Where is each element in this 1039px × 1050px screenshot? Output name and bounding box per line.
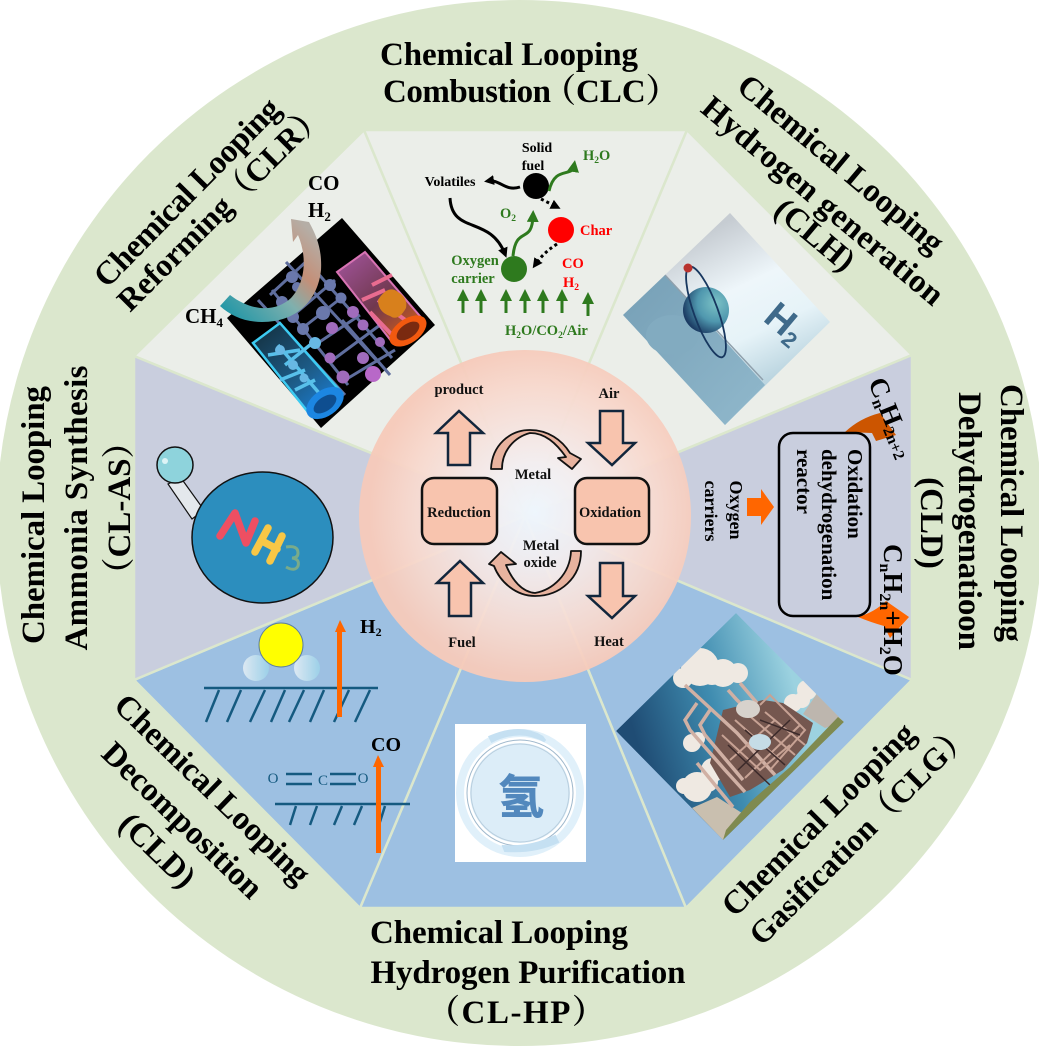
diagram: redox loop — [422, 382, 649, 651]
purple end node — [365, 366, 381, 382]
yellow atom — [259, 623, 303, 667]
pipes — [685, 683, 775, 807]
heading: CLR: Chemical Looping — [87, 91, 288, 295]
clouds — [673, 648, 817, 802]
heading: CL-HP: Hydrogen Purification — [370, 955, 686, 991]
central circle — [359, 350, 691, 682]
product formula: 2 — [876, 647, 893, 655]
diagram: dehydrogenation reactor: dehydrogenation — [817, 449, 841, 601]
label: CO: CO — [371, 734, 401, 756]
diagram: redox loop: Fuel — [448, 635, 476, 651]
heading: CLR: Reforming（CLR） — [109, 95, 332, 318]
image: hydrogen atom — [623, 213, 830, 425]
pink cylinder — [337, 252, 425, 342]
node: solid fuel — [523, 173, 549, 199]
heading: CL-HP: （CL-HP） — [427, 995, 605, 1031]
arrow: CH4 to CO and H2 — [220, 219, 321, 322]
blue cylinder — [253, 323, 342, 412]
diagram: solid fuel combustion: Oxygen — [451, 253, 499, 269]
reactant formula: H — [873, 399, 909, 430]
reactant formula: n — [868, 397, 887, 411]
oxygen carrier arrow — [747, 489, 774, 525]
label: H2: 2 — [376, 625, 382, 639]
panel: CLG sector background — [525, 516, 912, 908]
arrow: fuel — [437, 561, 483, 616]
diagram: solid fuel combustion: fuel — [522, 159, 544, 174]
panel: CLD dehydrogenation sector background — [525, 355, 912, 680]
diagram: solid fuel combustion: H — [583, 148, 594, 164]
diagram: redox loop: Heat — [594, 634, 624, 650]
node: char — [548, 217, 574, 243]
image: molecular reactor diagram — [227, 218, 435, 428]
panel: CL-HP sector background — [360, 516, 686, 908]
oxygen carrier labels: Oxygen — [726, 480, 746, 540]
reactant formula: C — [862, 373, 898, 402]
arrow: heat — [588, 563, 635, 618]
label: H2: 2 — [324, 209, 331, 224]
heading: CL-HP: Chemical Looping — [370, 915, 628, 951]
panel: CLC sector background — [364, 130, 687, 516]
bottom product arrow — [858, 601, 909, 638]
arrow: metal to oxidation — [491, 430, 581, 469]
connector arrows — [450, 166, 574, 265]
lower surface — [275, 804, 410, 825]
diagram: solid fuel combustion — [425, 141, 613, 341]
diagram: redox loop: oxide — [523, 555, 557, 571]
image: ammonia molecule — [157, 447, 333, 603]
heading: CLH: (CLH) — [767, 192, 862, 279]
diagram: dehydrogenation reactor: reactor — [792, 449, 816, 514]
top feed arrow — [845, 413, 896, 441]
heading: CLC: Chemical Looping — [380, 37, 638, 73]
diagram: solid fuel combustion: carrier — [451, 271, 495, 287]
heading: CLD dehydrogenation: (CLD) — [913, 477, 949, 569]
box: oxidation — [575, 478, 649, 544]
ground — [723, 717, 844, 840]
diagram: solid fuel combustion: 2 — [574, 283, 579, 293]
image: hydrogen atom: 2 — [777, 326, 802, 353]
arrow: product — [436, 411, 483, 465]
labels: Solid — [522, 141, 552, 156]
panel: CL-AS sector background — [134, 356, 525, 680]
heading: CLD dehydrogenation: Chemical Looping — [993, 384, 1029, 642]
heading: CLD decomposition: Chemical Looping — [107, 687, 318, 893]
heading: CLC: Combustion — [383, 74, 551, 110]
label: H2: H — [308, 198, 324, 222]
heading: CL-HP — [370, 915, 686, 1031]
heading: CL-AS — [16, 365, 138, 650]
reactor labels: Oxidation — [843, 449, 867, 539]
product formula: C — [878, 544, 908, 564]
heading: CLC: （CLC） — [543, 74, 679, 110]
diagram: solid fuel combustion: Char — [580, 223, 613, 239]
box: reduction: Reduction — [427, 505, 491, 521]
heading: CLC — [380, 37, 679, 110]
panel: CLR sector background — [134, 130, 525, 516]
label: CO: CO — [308, 171, 340, 195]
upper surface — [204, 688, 378, 722]
image: hydrogen atom: H — [756, 295, 804, 345]
product formula: 2n — [876, 593, 893, 610]
diagram: solid fuel combustion: 2 — [516, 331, 521, 341]
mountains — [803, 692, 844, 728]
diagram: solid fuel combustion: O — [500, 206, 511, 222]
diagram: solid fuel combustion: /Air — [562, 323, 588, 339]
diagram: solid fuel combustion: O/CO — [521, 323, 558, 339]
image: surface adsorption H2 and CO — [204, 616, 410, 853]
diagram: solid fuel combustion: 2 — [511, 214, 516, 224]
label: CH4: 4 — [216, 315, 224, 330]
product formula: O — [878, 655, 908, 676]
carbon dioxide molecule: C — [318, 773, 328, 789]
diagram: redox loop: Metal — [515, 467, 551, 483]
reactant formula: 2n+2 — [879, 424, 908, 462]
carbon dioxide molecule: O — [358, 771, 369, 787]
heading: CLD decomposition: (CLD) — [111, 806, 202, 896]
diagram: dehydrogenation reactor: carriers — [701, 481, 721, 541]
plant body — [710, 700, 813, 797]
image: gasification plant — [616, 613, 844, 840]
diagram: redox loop: Air — [599, 386, 620, 402]
label: CH4: CH — [185, 304, 216, 328]
heading: CLG: Gasification（CLG） — [741, 715, 978, 952]
diagram: solid fuel combustion: 2 — [558, 331, 563, 341]
heading: CL-AS: Ammonia Synthesis — [59, 365, 95, 650]
orange arrows — [335, 620, 384, 853]
arrow: air — [588, 411, 635, 465]
product formula: H — [878, 572, 908, 593]
node: oxygen carrier — [501, 256, 527, 282]
reactor box — [779, 433, 870, 616]
heading: CLD dehydrogenation — [913, 384, 1029, 650]
diagram: solid fuel combustion: H — [505, 323, 516, 339]
heading: CLG: Chemical Looping — [715, 716, 923, 924]
diagram: redox loop: Metal — [523, 538, 559, 554]
octagon sectors — [134, 130, 912, 908]
product formula: +H — [878, 610, 908, 647]
diagram: solid fuel combustion: 2 — [594, 156, 599, 166]
box: reduction — [422, 478, 497, 544]
box: oxidation: Oxidation — [579, 505, 641, 521]
rising green arrows — [463, 295, 588, 316]
image: hydrogen badge — [455, 724, 586, 862]
labels: product — [435, 382, 484, 398]
product formula: n — [876, 564, 893, 572]
carbon dioxide molecule — [268, 771, 369, 789]
diagram: solid fuel combustion: O — [599, 148, 610, 164]
arrow: metal oxide to reduction — [489, 551, 581, 596]
image: hydrogen badge: 氢 — [498, 761, 544, 827]
heading: CL-AS: （CL-AS） — [102, 425, 138, 591]
small hydrogen atoms — [243, 655, 320, 681]
heading: CLD decomposition: Decomposition — [94, 735, 270, 906]
label: H2: H — [360, 616, 376, 638]
heading: CL-AS: Chemical Looping — [16, 386, 52, 644]
panel: CLH sector background — [525, 130, 912, 516]
diagram: solid fuel combustion: CO — [562, 256, 584, 272]
heading: CLH: Hydrogen generation — [694, 90, 951, 313]
diagram: solid fuel combustion: H — [563, 275, 574, 291]
diagram: dehydrogenation reactor — [701, 373, 922, 676]
panel: CLD decomposition sector background — [134, 516, 525, 908]
heading: CLH: Chemical Looping — [730, 68, 951, 261]
carbon dioxide molecule: O — [268, 771, 279, 787]
diagram: solid fuel combustion: Volatiles — [425, 175, 476, 190]
heading: CLD dehydrogenation: Dehydrogenatioon — [951, 392, 987, 650]
